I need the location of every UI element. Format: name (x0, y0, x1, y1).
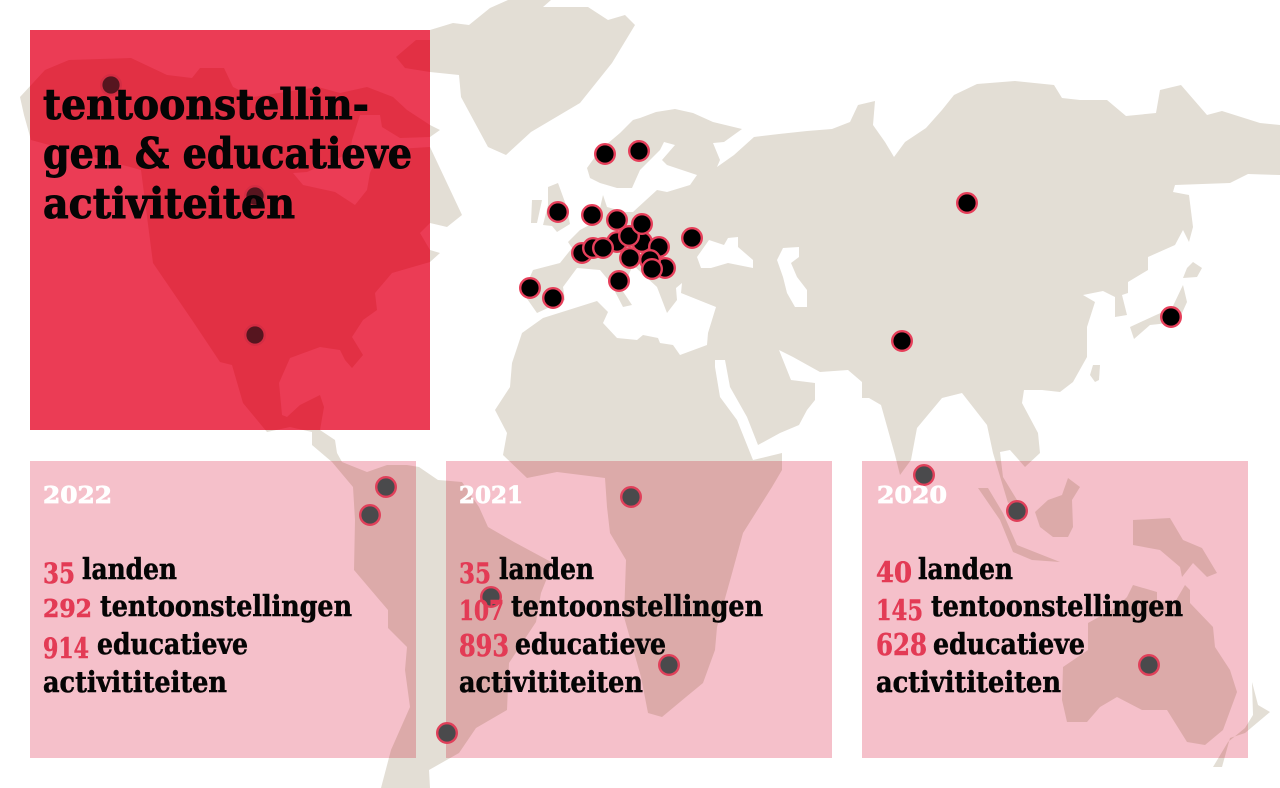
panel: 2020 background (862, 461, 1248, 758)
statistics 2021 (459, 482, 763, 699)
statistics 2022: tentoonstellingen (100, 589, 352, 623)
statistics 2020 (876, 482, 1183, 699)
statistics 2021: 35 (459, 557, 491, 590)
statistics 2022: 292 (43, 594, 92, 623)
statistics 2022: activititeiten (43, 665, 227, 699)
statistics 2021: 893 (459, 629, 509, 664)
statistics 2022 (43, 482, 352, 699)
location dots: Europe and Asia (520, 141, 1181, 351)
title: tentoonstellin- (43, 80, 369, 129)
title (43, 80, 412, 228)
statistics 2022: landen (82, 552, 177, 586)
statistics 2021: landen (499, 552, 594, 586)
statistics 2020: landen (918, 552, 1013, 586)
statistics 2020: educatieve (933, 627, 1085, 661)
statistics 2021: educatieve (515, 627, 666, 661)
statistics 2022: 2022 (43, 482, 112, 509)
statistics 2020: tentoonstellingen (931, 589, 1183, 623)
statistics 2020: 40 (876, 556, 912, 589)
title: gen & educatieve (43, 129, 412, 178)
title: activiteiten (43, 179, 295, 228)
statistics 2022: educatieve (97, 627, 248, 661)
statistics 2021: 2021 (459, 482, 523, 509)
statistics 2021: tentoonstellingen (511, 589, 763, 623)
panel: 2021 background (446, 461, 832, 758)
statistics 2022: 914 (43, 632, 89, 665)
statistics 2021: activititeiten (459, 665, 643, 699)
statistics 2021: 107 (459, 596, 504, 627)
statistics 2022: 35 (43, 557, 75, 590)
location dots: under heading panel (101, 75, 265, 345)
panel: 2022 background (30, 461, 416, 758)
panel: heading background (30, 30, 430, 430)
statistics 2020: 628 (876, 628, 927, 663)
statistics 2020: 2020 (877, 482, 947, 509)
location dots: under statistic panels (360, 465, 1159, 743)
statistics 2020: activititeiten (876, 665, 1061, 699)
statistics 2020: 145 (876, 594, 923, 627)
